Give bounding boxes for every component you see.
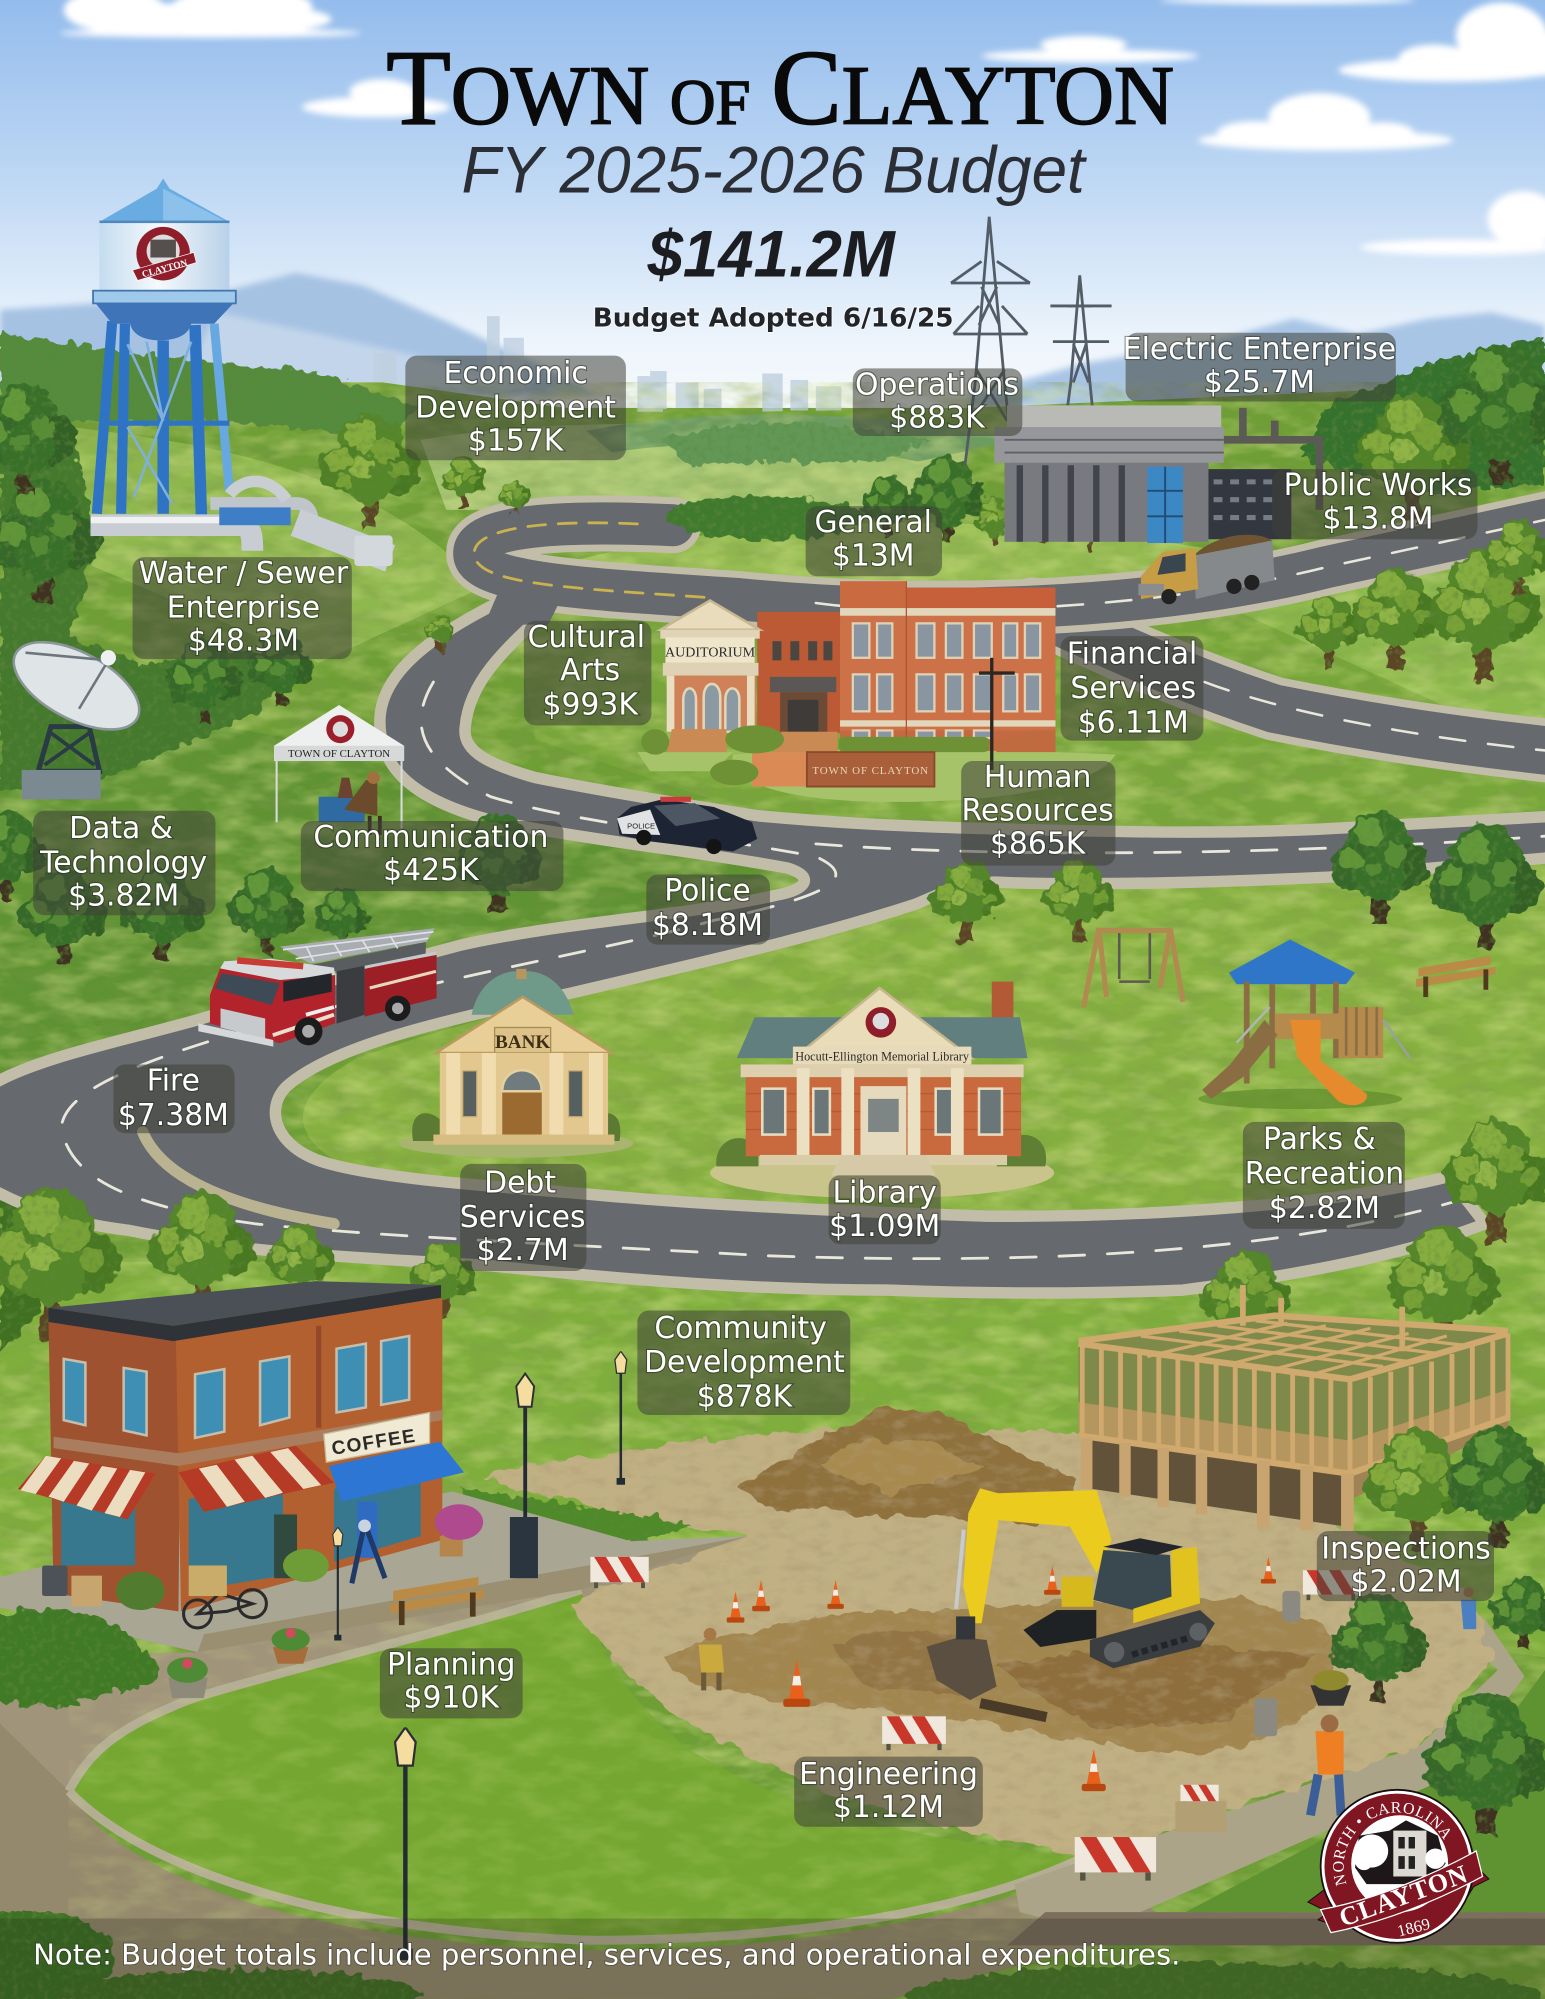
label: Inspections: $2.02M <box>1351 1565 1462 1600</box>
label: Financial Services <box>1061 636 1203 741</box>
label: Debt Services: Services <box>460 1200 586 1235</box>
road median <box>143 1132 334 1224</box>
label: Financial Services: Services <box>1070 671 1196 706</box>
label: Debt Services: $2.7M <box>477 1233 569 1268</box>
label: Economic Development: $157K <box>468 424 565 459</box>
label: Police: $8.18M <box>652 908 763 943</box>
seal: North Carolina Clayton 1869: CLAYTON <box>1335 1859 1472 1932</box>
auditorium <box>660 600 760 630</box>
town hall and auditorium: AUDITORIUM <box>665 646 756 661</box>
label: Operations: $883K <box>889 401 986 436</box>
shrubs <box>641 725 989 785</box>
police car <box>617 797 757 854</box>
coffee shop <box>18 1281 483 1628</box>
label: Cultural Arts <box>524 620 651 725</box>
label: Cultural Arts: Cultural <box>528 620 645 655</box>
label: Water / Sewer Enterprise: $48.3M <box>188 624 299 659</box>
tower block <box>840 581 906 730</box>
label: Parks and Recreation: $2.82M <box>1269 1191 1380 1226</box>
label: Water / Sewer Enterprise: Water / Sewer <box>139 556 349 591</box>
trees: mid-field groups <box>0 344 1545 1353</box>
label: Library: $1.09M <box>829 1209 940 1244</box>
subtitle: FY 2025-2026 Budget <box>461 133 1087 207</box>
satellite dish <box>0 624 153 799</box>
label: Public Works: Public Works <box>1284 468 1472 503</box>
label: Economic Development: Development <box>415 390 616 425</box>
label: Inspections <box>1317 1531 1494 1601</box>
playground <box>1198 940 1410 1109</box>
swing set <box>1084 928 1183 1007</box>
label: Communication: $425K <box>383 853 480 888</box>
hedge bushes left of plaza <box>0 1609 158 1706</box>
label: Parks and Recreation: Parks & <box>1263 1122 1376 1157</box>
flower planters <box>167 1628 1351 1706</box>
note strip <box>0 1919 1545 1999</box>
water tower <box>91 178 393 566</box>
tower legs <box>97 321 229 515</box>
plaza items <box>42 1565 68 1596</box>
label: Engineering <box>794 1757 983 1827</box>
label: Electric Enterprise: $25.7M <box>1204 365 1315 400</box>
seal: North Carolina Clayton 1869: 1869 <box>1395 1914 1432 1940</box>
dump truck <box>1138 535 1275 604</box>
construction workers <box>699 1587 1476 1815</box>
library: Hocutt-Ellington Memorial Library <box>795 1050 970 1064</box>
label: Engineering: $1.12M <box>833 1790 944 1825</box>
clouds <box>60 0 1545 255</box>
shop windows <box>64 1336 409 1438</box>
label: Parks and Recreation: Recreation <box>1245 1157 1404 1192</box>
road: main loop <box>0 597 1545 1293</box>
lamp posts and bench <box>333 1351 627 1960</box>
note: Note: Budget totals include personnel, services, and operational expenditures. <box>33 1938 1180 1971</box>
label: Electric Enterprise: Electric Enterprise <box>1123 332 1396 367</box>
label: General: General <box>814 505 932 540</box>
coffee sign <box>324 1412 430 1462</box>
seal: North Carolina Clayton 1869 <box>1307 1788 1490 1944</box>
label: Communication <box>301 820 563 891</box>
road: right branch behind town hall <box>1033 609 1545 752</box>
bank <box>399 969 634 1158</box>
label: Communication: Communication <box>313 820 548 855</box>
label: Library <box>829 1175 941 1244</box>
excavator <box>927 1488 1215 1717</box>
main block <box>906 588 1055 751</box>
tank seal <box>133 227 196 280</box>
label: Engineering: Engineering <box>799 1757 978 1792</box>
label: Data and Technology: Technology <box>39 846 207 881</box>
sky <box>0 0 1545 408</box>
label: Planning: $910K <box>404 1681 500 1716</box>
barricades <box>590 1557 1359 1881</box>
label: Fire: $7.38M <box>118 1098 229 1133</box>
label: Fire: Fire <box>147 1064 200 1099</box>
label: Water / Sewer Enterprise: Enterprise <box>167 591 320 626</box>
label: Police: Police <box>664 874 751 909</box>
wood frame building <box>1078 1285 1508 1530</box>
label: Operations <box>853 367 1022 436</box>
label: Planning <box>380 1647 523 1718</box>
coffee sign: COFFEE <box>330 1426 418 1460</box>
pipes <box>91 481 393 566</box>
label: Community Development: Development <box>644 1345 845 1380</box>
mountains <box>0 273 1545 408</box>
roads <box>0 516 1545 1293</box>
plaza and back hedge <box>0 1488 748 1652</box>
label: Public Works <box>1272 468 1477 539</box>
label: Debt Services <box>460 1164 586 1271</box>
communication tent <box>274 705 404 835</box>
label: General: $13M <box>832 538 915 573</box>
label: Cultural Arts: $993K <box>543 687 639 722</box>
storefront <box>61 1466 421 1591</box>
park bench <box>1416 956 1495 997</box>
power pylons <box>951 217 1112 465</box>
label: Operations: Operations <box>855 367 1019 402</box>
label: Economic Development: Economic <box>443 356 588 391</box>
bottom area: paths and lawn <box>0 1536 1545 1999</box>
road: upper loop <box>474 516 1545 610</box>
label: Debt Services: Debt <box>484 1166 556 1201</box>
label: Financial Services: Financial <box>1067 636 1197 671</box>
label: Human Resources: Human <box>984 760 1091 795</box>
wing <box>757 612 840 733</box>
town hall and auditorium: TOWN OF CLAYTON <box>812 765 929 777</box>
electric substation <box>994 405 1319 543</box>
label: Police <box>646 874 770 945</box>
label: Water / Sewer Enterprise <box>133 556 352 659</box>
label: Data and Technology: Data & <box>69 811 173 846</box>
awnings <box>18 1456 156 1520</box>
tree band far left and right <box>0 334 1545 1351</box>
police car: POLICE <box>627 822 655 831</box>
town hall and auditorium <box>637 581 1115 802</box>
trees around frame <box>1330 1426 1545 1837</box>
label: Community Development <box>637 1310 850 1415</box>
label: Human Resources <box>961 760 1115 866</box>
label: Data and Technology <box>33 811 215 915</box>
label: Public Works: $13.8M <box>1322 501 1434 536</box>
bottom bushes <box>0 1911 1542 1999</box>
label: Financial Services: $6.11M <box>1078 705 1189 740</box>
label: Library: Library <box>833 1176 937 1211</box>
label: Planning: Planning <box>387 1647 515 1682</box>
traffic cones <box>727 1557 1300 1791</box>
bank: BANK <box>495 1032 550 1053</box>
title: TOWN OF CLAYTON <box>386 30 1174 148</box>
label: Human Resources: Resources <box>962 793 1114 828</box>
label: General <box>806 505 942 576</box>
label: Inspections: Inspections <box>1321 1531 1491 1566</box>
tank seal: CLAYTON <box>141 258 189 280</box>
adoption date: Budget Adopted 6/16/25 <box>593 303 954 333</box>
fire truck <box>198 928 437 1047</box>
hazy city skyline <box>374 316 841 412</box>
label: Parks and Recreation <box>1243 1122 1405 1229</box>
label: Electric Enterprise <box>1123 332 1396 402</box>
construction dirt field <box>483 1409 1494 1857</box>
total budget: $141.2M <box>647 218 897 292</box>
seal: North Carolina Clayton 1869: NORTH • CAROLINA <box>1333 1802 1450 1886</box>
communication tent: TOWN OF CLAYTON <box>288 748 390 760</box>
label: Community Development: $878K <box>697 1380 794 1415</box>
road lane dashes <box>61 682 1545 1259</box>
label: Human Resources: $865K <box>990 826 1087 861</box>
town hall windows <box>853 623 1040 738</box>
label: Cultural Arts: Arts <box>560 653 620 688</box>
label: Data and Technology: $3.82M <box>68 879 179 914</box>
label: Economic Development <box>405 356 626 460</box>
label: Fire <box>113 1064 235 1133</box>
library <box>710 982 1054 1198</box>
label: Community Development: Community <box>654 1311 827 1346</box>
